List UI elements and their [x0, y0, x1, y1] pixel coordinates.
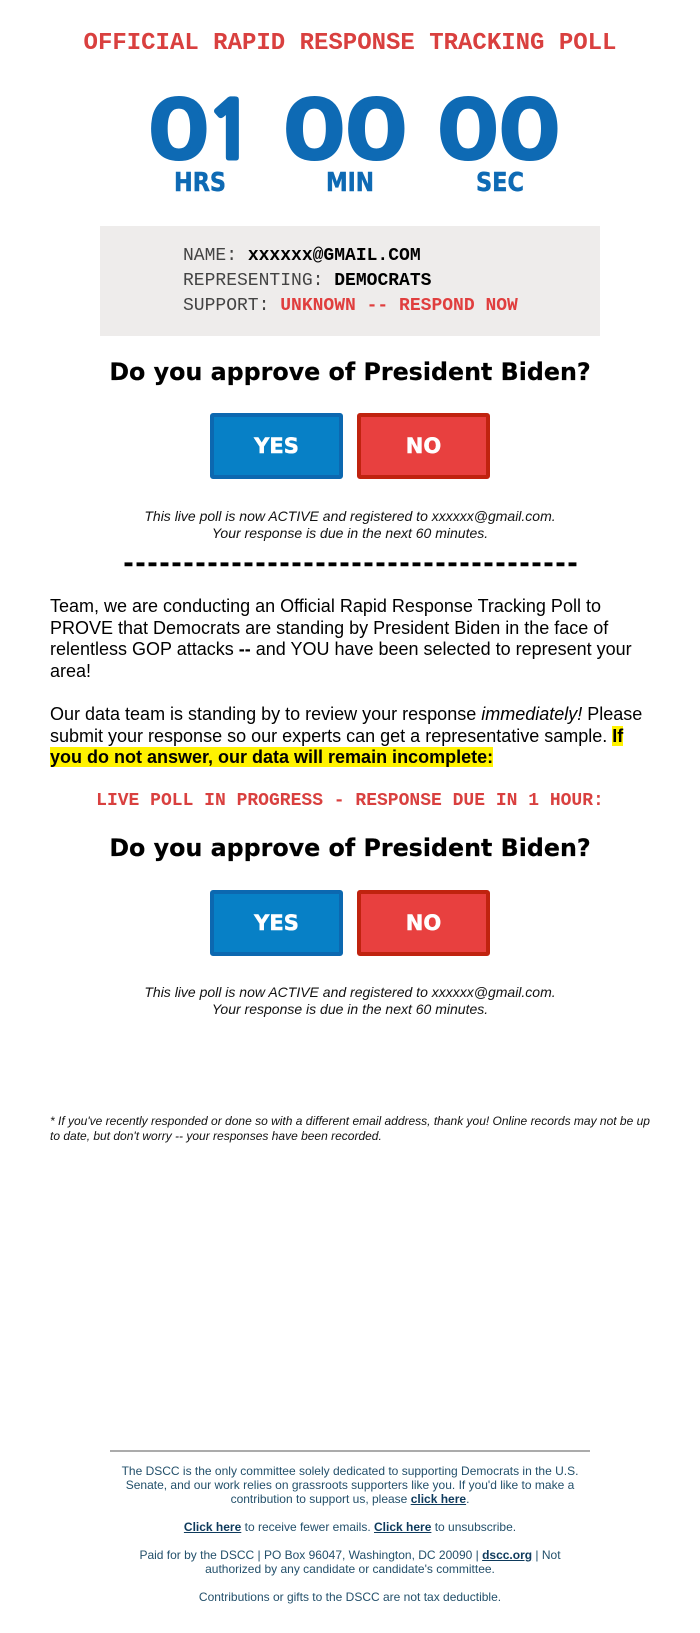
- poll status note repeated: [144, 984, 556, 1017]
- footnote: to date, but don't worry -- your responses have been recorded.: [50, 1129, 382, 1143]
- body paragraph two: you do not answer, our data will remain incomplete:: [50, 747, 493, 767]
- footer email preferences: Click here to receive fewer emails. Click here to unsubscribe.: [184, 1520, 516, 1534]
- minutes counter: MIN: [326, 168, 374, 198]
- footer disclaimer: authorized by any candidate or candidate's committee.: [205, 1562, 495, 1576]
- body paragraph one: [50, 596, 632, 681]
- hours counter: 1: [206, 92, 256, 170]
- poll status note: [144, 508, 556, 541]
- poll status note repeated: Your response is due in the next 60 minutes.: [212, 1001, 488, 1017]
- poll status note repeated: This live poll is now ACTIVE and registered to xxxxxx@gmail.com.: [144, 984, 556, 1000]
- hours counter: 0: [148, 92, 209, 170]
- yes button: YES: [254, 434, 299, 458]
- representing row: REPRESENTING: DEMOCRATS: [183, 271, 431, 291]
- yes button repeated: [210, 890, 343, 956]
- footer tax note: Contributions or gifts to the DSCC are not tax deductible.: [199, 1590, 501, 1604]
- poll status note: This live poll is now ACTIVE and registered to xxxxxx@gmail.com.: [144, 508, 556, 524]
- body paragraph two: Our data team is standing by to review your response immediately! Please: [50, 704, 642, 724]
- body paragraph one: Team, we are conducting an Official Rapid Response Tracking Poll to: [50, 596, 601, 616]
- poll status note: Your response is due in the next 60 minutes.: [212, 525, 488, 541]
- live poll notice: LIVE POLL IN PROGRESS - RESPONSE DUE IN 1 HOUR:: [96, 791, 604, 811]
- yes button repeated: YES: [254, 911, 299, 935]
- name row: NAME: xxxxxx@GMAIL.COM: [183, 246, 421, 266]
- countdown timer: [148, 92, 560, 198]
- seconds counter: SEC: [476, 168, 524, 198]
- footer about text: [122, 1464, 578, 1506]
- heading: repeated poll question: Do you approve of President Biden?: [109, 834, 591, 862]
- footer rule: [110, 1450, 590, 1452]
- support row: SUPPORT: UNKNOWN -- RESPOND NOW: [183, 296, 518, 316]
- footer about text: The DSCC is the only committee solely dedicated to supporting Democrats in the U.S.: [122, 1464, 578, 1478]
- footer: [110, 1450, 590, 1604]
- footer about text: contribution to support us, please click here.: [231, 1492, 469, 1506]
- no button: NO: [406, 434, 441, 458]
- body paragraph two: submit your response so our experts can get a representative sample. If: [50, 726, 623, 746]
- footnote: [50, 1114, 650, 1143]
- seconds counter: [437, 92, 560, 198]
- body paragraph two: [50, 704, 642, 767]
- footer about text: Senate, and our work relies on grassroots supporters like you. If you'd like to make a: [126, 1478, 574, 1492]
- footnote: * If you've recently responded or done so with a different email address, thank you! Online records may not be up: [50, 1114, 650, 1128]
- yes button: [210, 413, 343, 479]
- panel: respondent details: [100, 226, 600, 336]
- body paragraph one: area!: [50, 661, 91, 681]
- body paragraph one: PROVE that Democrats are standing by President Biden in the face of: [50, 618, 608, 638]
- body paragraph one: relentless GOP attacks -- and YOU have been selected to represent your: [50, 639, 632, 659]
- minutes counter: 00: [283, 92, 407, 170]
- heading: poll question: Do you approve of President Biden?: [109, 358, 591, 386]
- seconds counter: 00: [437, 92, 560, 170]
- footer disclaimer: [139, 1548, 561, 1576]
- no button repeated: [357, 890, 490, 956]
- no button: [357, 413, 490, 479]
- title: OFFICIAL RAPID RESPONSE TRACKING POLL: [84, 30, 616, 57]
- dashed separator: --------------------------------------: [124, 549, 580, 577]
- minutes counter: [283, 92, 407, 198]
- hours counter: [148, 92, 256, 198]
- hours counter: HRS: [174, 168, 226, 198]
- footer disclaimer: Paid for by the DSCC | PO Box 96047, Washington, DC 20090 | dscc.org | Not: [139, 1548, 561, 1562]
- no button repeated: NO: [406, 911, 441, 935]
